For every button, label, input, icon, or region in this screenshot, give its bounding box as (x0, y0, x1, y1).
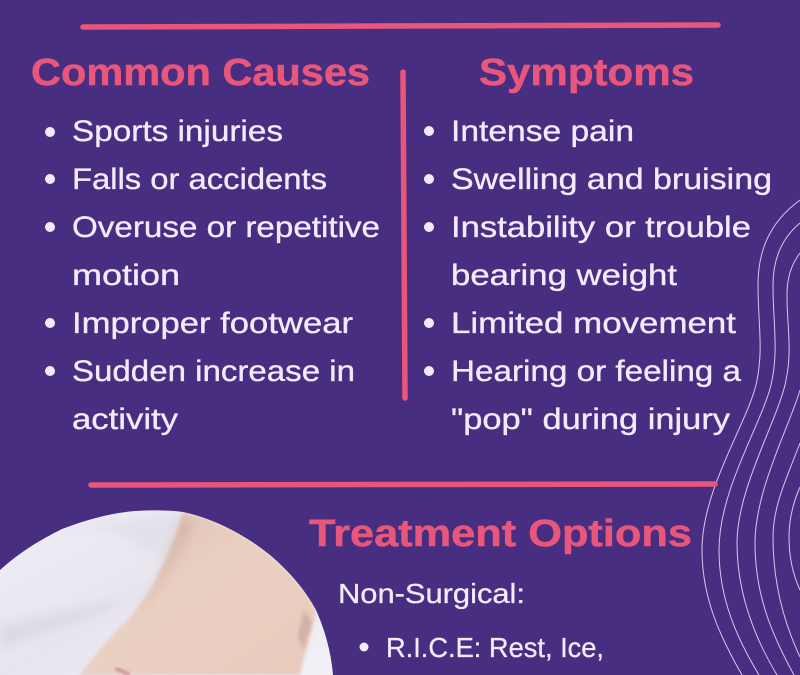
heading: common causes: Common Causes (31, 52, 370, 94)
text: non-surgical: Non-Surgical: (338, 578, 525, 609)
bottom divider (91, 484, 715, 485)
decorative wave lines (702, 200, 800, 675)
photo: injured ankle (0, 505, 340, 675)
top divider (83, 25, 718, 27)
list: causes (45, 115, 380, 436)
list: symptoms (424, 115, 772, 436)
heading: symptoms: Symptoms (479, 52, 694, 94)
heading: treatment options: Treatment Options (309, 513, 692, 555)
list item: rice: R.I.C.E: Rest, Ice, (386, 632, 604, 663)
list: causes: Improper footwear (72, 307, 353, 340)
list: causes: motion (72, 259, 180, 292)
list: causes: Sudden increase in (72, 355, 355, 388)
list: causes: activity (72, 403, 178, 436)
list: symptoms: Swelling and bruising (451, 163, 772, 196)
list: symptoms: Intense pain (451, 115, 634, 148)
panel: symptoms (424, 52, 772, 436)
column divider (403, 72, 405, 398)
list: symptoms: Instability or trouble (451, 211, 751, 244)
list: symptoms: bearing weight (451, 259, 678, 292)
panel: common causes (31, 52, 380, 436)
list: symptoms: "pop" during injury (451, 403, 730, 436)
list: symptoms: Hearing or feeling a (451, 355, 741, 388)
list: causes: Falls or accidents (72, 163, 327, 196)
list: causes: Sports injuries (72, 115, 283, 148)
list: causes: Overuse or repetitive (72, 211, 380, 244)
panel: treatment options (309, 513, 692, 663)
list: symptoms: Limited movement (451, 307, 737, 340)
